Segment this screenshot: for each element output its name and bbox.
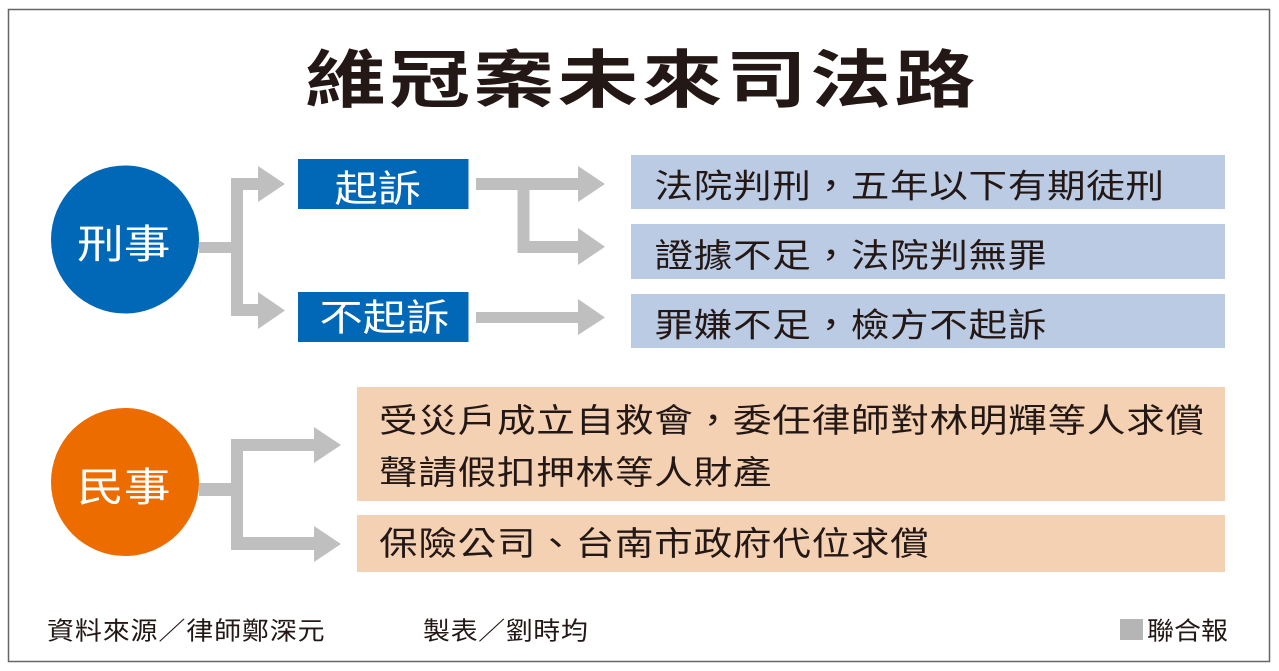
label: not indicted: 不起訴 — [320, 297, 449, 339]
arrow: indicted branches — [476, 166, 605, 265]
circle: criminal — [51, 166, 199, 314]
panel: civil — [51, 387, 1225, 572]
arrow: criminal branches — [199, 166, 285, 329]
title: 維冠案未來司法路 — [305, 46, 979, 116]
label: indicted — [298, 159, 468, 210]
outcome: acquitted: 證據不足，法院判無罪 — [654, 237, 1047, 274]
arrow: civil branches — [199, 427, 341, 562]
source credit: 資料來源／律師鄭深元 — [47, 616, 325, 645]
author credit: 製表／劉時均 — [423, 616, 588, 645]
outcome: insurers claim: 保險公司、台南市政府代位求償 — [379, 525, 930, 562]
circle: civil: 民事 — [77, 466, 171, 510]
label: indicted: 起訴 — [334, 168, 421, 210]
circle: civil — [51, 408, 199, 556]
arrow: not indicted outcome — [476, 299, 605, 335]
outcome: not indicted — [631, 294, 1225, 348]
outcome: not indicted: 罪嫌不足，檢方不起訴 — [654, 306, 1047, 344]
label: not indicted — [298, 292, 468, 342]
publisher mark: 聯合報 — [1147, 616, 1228, 645]
outcome: victims claim: 聲請假扣押林等人財產 — [379, 454, 772, 491]
outcome: acquitted — [631, 224, 1225, 279]
panel: criminal — [51, 155, 1225, 348]
outcome: sentenced — [631, 155, 1225, 209]
outcome: victims claim: 受災戶成立自救會，委任律師對林明輝等人求償 — [379, 402, 1205, 439]
outcome: sentenced: 法院判刑，五年以下有期徒刑 — [654, 167, 1165, 205]
circle: criminal: 刑事 — [77, 223, 171, 267]
outcome: insurers claim — [357, 515, 1225, 572]
outcome: victims claim — [357, 387, 1225, 501]
